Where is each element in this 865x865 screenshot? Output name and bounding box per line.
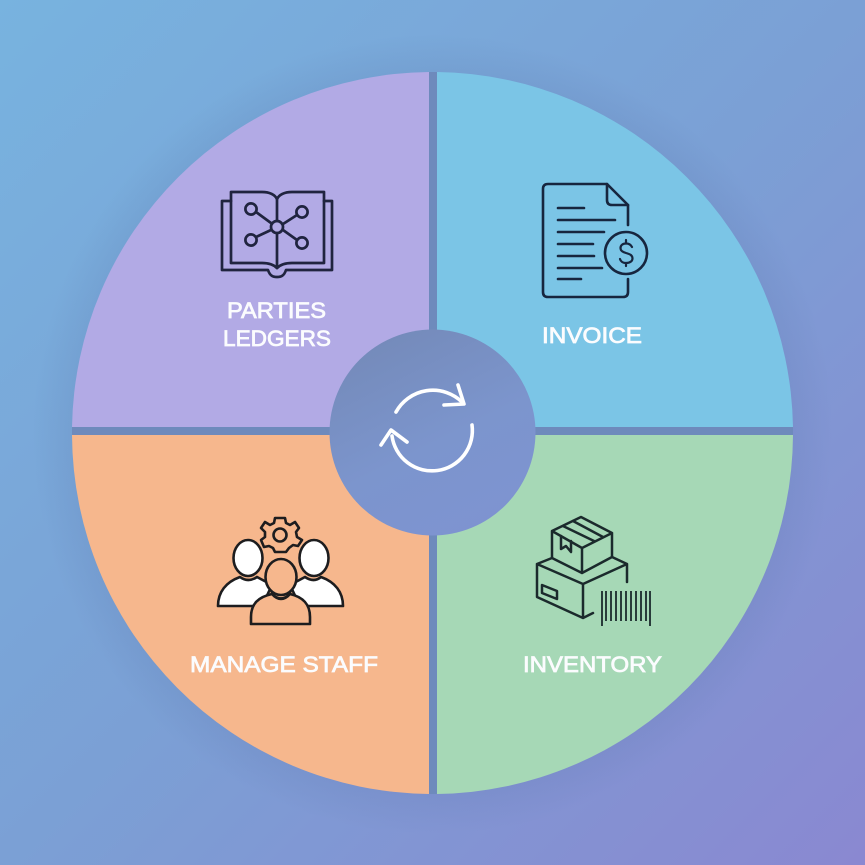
right person xyxy=(290,540,343,606)
label: inventory: INVENTORY xyxy=(523,652,662,677)
icon: ledger book network xyxy=(222,192,332,277)
icon: invoice document xyxy=(543,184,647,297)
gear xyxy=(261,518,302,552)
centre hub xyxy=(330,330,536,536)
label: manage staff: MANAGE STAFF xyxy=(190,652,378,677)
label: invoice: INVOICE xyxy=(542,323,642,348)
label: parties ledgers xyxy=(223,298,331,351)
quadrant: invoice xyxy=(437,72,793,427)
icon: cycle arrows xyxy=(381,385,472,471)
label: parties ledgers: PARTIES xyxy=(227,298,326,323)
quadrant: inventory xyxy=(437,435,793,794)
disc gap channels xyxy=(72,72,793,794)
quadrant: parties ledgers xyxy=(72,72,429,427)
label: parties ledgers: LEDGERS xyxy=(223,326,331,351)
front person xyxy=(251,559,310,624)
icon: team with gear xyxy=(218,518,343,624)
icon: boxes with barcode xyxy=(537,517,650,626)
left person xyxy=(218,540,272,606)
quadrant: manage staff xyxy=(72,435,429,794)
